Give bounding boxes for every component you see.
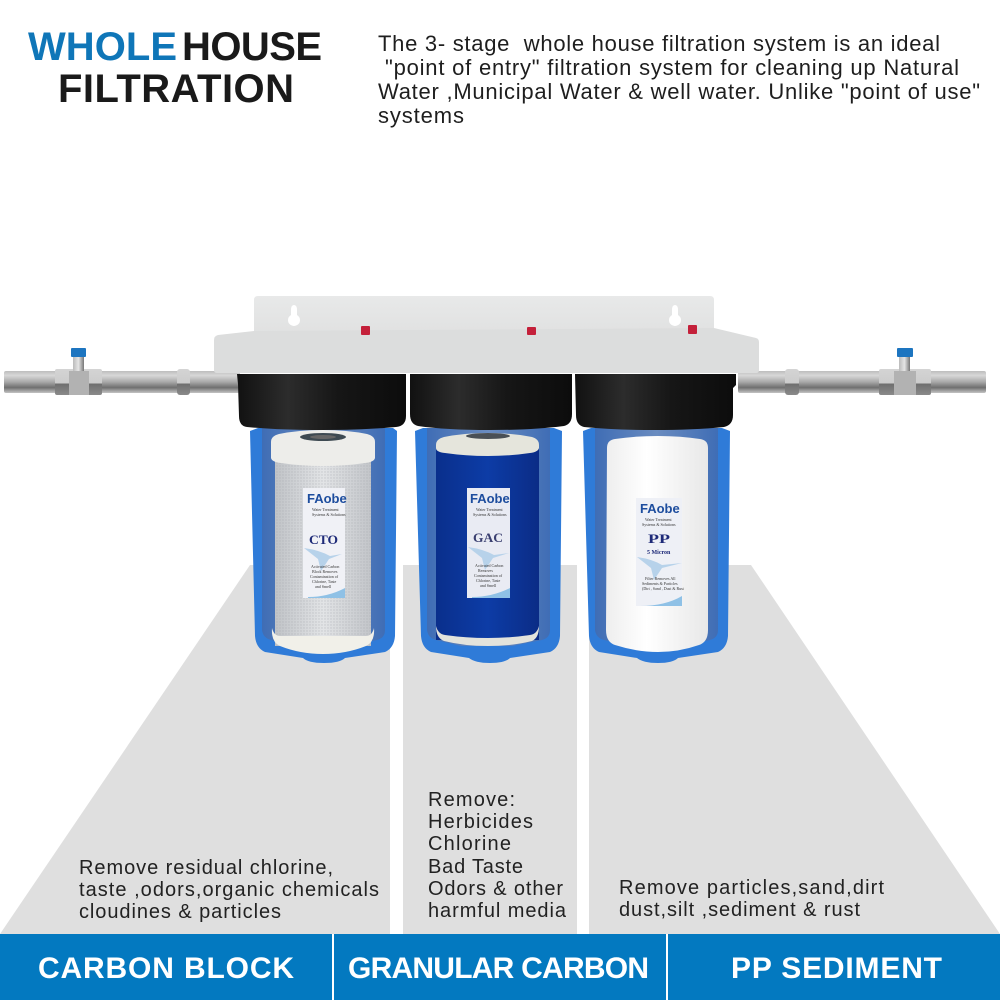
mounting bracket	[214, 296, 759, 373]
label: GAC: Water Treatment	[476, 507, 504, 512]
carbon block description: cloudines & particles	[79, 901, 281, 923]
granular carbon description	[428, 789, 567, 922]
label: granular carbon: GRANULAR CARBON	[348, 952, 649, 985]
label: GAC: Chlorine, Taste	[476, 578, 501, 584]
label: GAC: Removes	[478, 568, 493, 573]
label: GAC: Systems & Solutions	[473, 512, 507, 517]
carbon block description: Remove residual chlorine,	[79, 857, 333, 879]
pp sediment description: dust,silt ,sediment & rust	[619, 899, 860, 921]
panel: granular carbon backdrop	[403, 565, 577, 934]
label: PP: Filter Removes All	[645, 576, 676, 581]
label: CTO	[303, 488, 347, 598]
label: CTO: and Smell	[315, 584, 332, 589]
carbon block description: taste ,odors,organic chemicals	[79, 879, 379, 901]
filter cap 1	[237, 374, 406, 430]
cartridge: GAC	[436, 433, 539, 646]
label: PP: Sediments & Particles	[642, 581, 678, 586]
pp sediment description: Remove particles,sand,dirt	[619, 877, 884, 899]
label: CTO: Water Treatment	[312, 507, 340, 512]
granular carbon description: Chlorine	[428, 833, 511, 855]
intro text block: systems	[378, 103, 464, 128]
intro text block: "point of entry" filtration system for cleaning up Natural	[385, 55, 959, 80]
title	[28, 25, 322, 111]
label: CTO: Block Removes	[312, 569, 338, 574]
label: CTO: Systems & Solutions	[312, 512, 346, 517]
icon: keyhole left	[288, 305, 300, 326]
panel: carbon block backdrop	[0, 565, 390, 934]
label: GAC	[467, 488, 510, 598]
label: PP	[636, 498, 685, 606]
label: PP: Water Treatment	[645, 517, 673, 522]
carbon block description	[79, 857, 379, 923]
granular carbon description: Odors & other	[428, 878, 563, 900]
label: GAC: FAobe	[470, 491, 510, 506]
intro text block: Water ,Municipal Water & well water. Unlike "point of use"	[378, 79, 980, 104]
label: GAC: and Smell	[480, 583, 497, 588]
icon: red button 1	[361, 326, 370, 335]
granular carbon description: Remove:	[428, 789, 515, 811]
label: PP: (Dirt , Sand , Dust & Rust	[642, 586, 685, 592]
label: GAC: Activated Carbon	[475, 563, 503, 568]
icon: right outlet pipe	[738, 348, 986, 395]
label: CTO: Activated Carbon	[311, 564, 339, 569]
label: CTO: CTO	[309, 532, 338, 547]
cartridge: CTO	[271, 430, 375, 654]
cartridge: PP	[606, 436, 708, 652]
icon: red button 3	[688, 325, 697, 334]
filter cap 2	[410, 374, 572, 430]
granular carbon description: harmful media	[428, 900, 567, 922]
granular carbon description: Herbicides	[428, 811, 533, 833]
label: CTO: Contamination of	[310, 574, 339, 579]
label: PP: FAobe	[640, 501, 680, 516]
filter housing 2: granular carbon	[415, 428, 562, 663]
icon: keyhole right	[669, 305, 681, 326]
label: GAC: GAC	[473, 530, 503, 545]
filter housing 3: pp sediment	[583, 428, 730, 663]
icon: left inlet pipe	[4, 348, 240, 395]
label: PP: 5 Micron	[647, 550, 671, 556]
label: PP: PP	[648, 531, 670, 546]
intro text block	[378, 31, 980, 128]
bottom label band	[0, 934, 1000, 1000]
label: PP: Systems & Solutions	[642, 522, 676, 527]
filter housing 1: carbon block	[250, 428, 397, 663]
intro text block: The 3- stage whole house filtration system is an ideal	[378, 31, 940, 56]
granular carbon description: Bad Taste	[428, 856, 523, 878]
label: carbon block: CARBON BLOCK	[38, 952, 294, 985]
label: CTO: FAobe	[307, 491, 347, 506]
pp sediment description	[619, 877, 884, 921]
panel: pp sediment backdrop	[589, 565, 1000, 934]
filter cap 3	[575, 374, 736, 430]
title: HOUSE	[182, 25, 322, 69]
label: pp sediment: PP SEDIMENT	[731, 952, 942, 985]
icon: red button 2	[527, 327, 536, 335]
title: FILTRATION	[58, 67, 294, 111]
title: WHOLE	[28, 25, 177, 69]
label: CTO: Chlorine, Taste	[312, 579, 337, 585]
label: GAC: Contamination of	[474, 573, 503, 578]
